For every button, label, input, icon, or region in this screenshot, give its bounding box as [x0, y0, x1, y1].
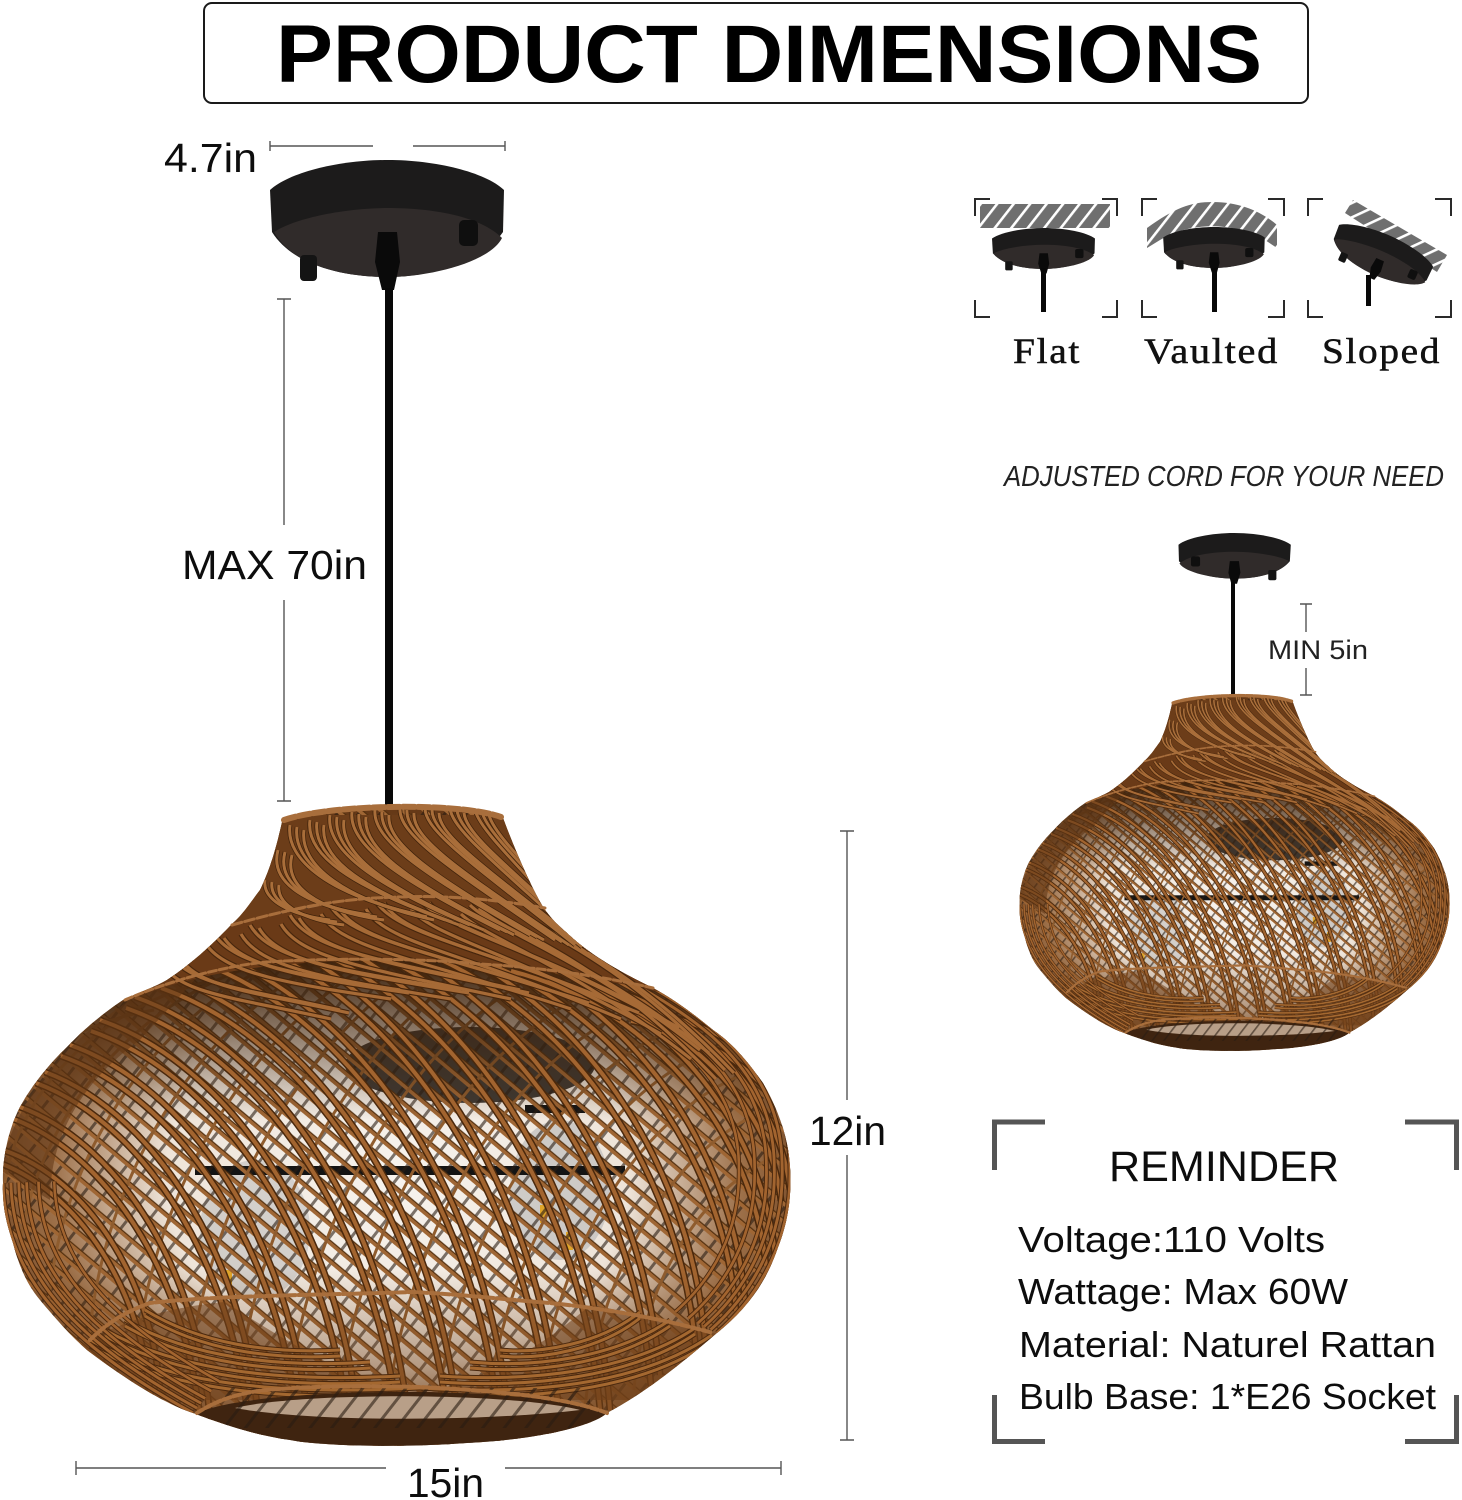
icon: vaulted ceiling: Vaulted [1144, 331, 1279, 371]
side rim strands [0, 930, 240, 1200]
icon: sloped ceiling [1308, 199, 1451, 371]
dimension: 12in: 12in [809, 1108, 886, 1154]
dimension: MAX 70in [182, 299, 367, 801]
panel: reminder [994, 1122, 1456, 1442]
bottom opening [190, 1392, 620, 1460]
collar and binding bands [90, 807, 713, 1413]
icon: flat ceiling: Flat [1013, 331, 1081, 371]
dimension: 4.7in: 4.7in [164, 135, 257, 181]
small cord [1231, 582, 1235, 698]
dimension: 4.7in [164, 135, 505, 181]
main strands [0, 925, 800, 1451]
lamp shade (large) [0, 800, 800, 1460]
icon: vaulted ceiling [1142, 199, 1284, 371]
panel: reminder: Bulb Base: 1*E26 Socket [1019, 1376, 1436, 1417]
small canopy [1178, 533, 1291, 584]
dimension: MIN 5in: MIN 5in [1268, 635, 1368, 665]
small shade [1015, 692, 1455, 1059]
panel: reminder: Wattage: Max 60W [1018, 1271, 1348, 1312]
cord (large) [385, 288, 393, 808]
dimension: 12in [809, 831, 886, 1440]
panel: reminder: Voltage:110 Volts [1018, 1219, 1325, 1260]
title: PRODUCT DIMENSIONS [276, 9, 1262, 100]
shoulder and neck [120, 890, 660, 1003]
panel: reminder: REMINDER [1109, 1143, 1339, 1191]
panel: reminder: Material: Naturel Rattan [1019, 1324, 1436, 1365]
shade interior and glass bulbs [0, 800, 800, 1460]
icon: sloped ceiling: Sloped [1322, 331, 1441, 371]
dimension: MAX 70in: MAX 70in [182, 542, 367, 588]
ceiling canopy (large) [270, 160, 504, 290]
lower shading and corner wedges [0, 1270, 794, 1400]
dimension: 15in [76, 1460, 781, 1500]
dimension: MIN 5in [1268, 604, 1368, 695]
small lamp at minimum cord length [1015, 533, 1455, 1059]
shoulder shading [0, 960, 794, 1120]
thin crossing strands [0, 925, 791, 1440]
icon: flat ceiling [975, 199, 1117, 371]
